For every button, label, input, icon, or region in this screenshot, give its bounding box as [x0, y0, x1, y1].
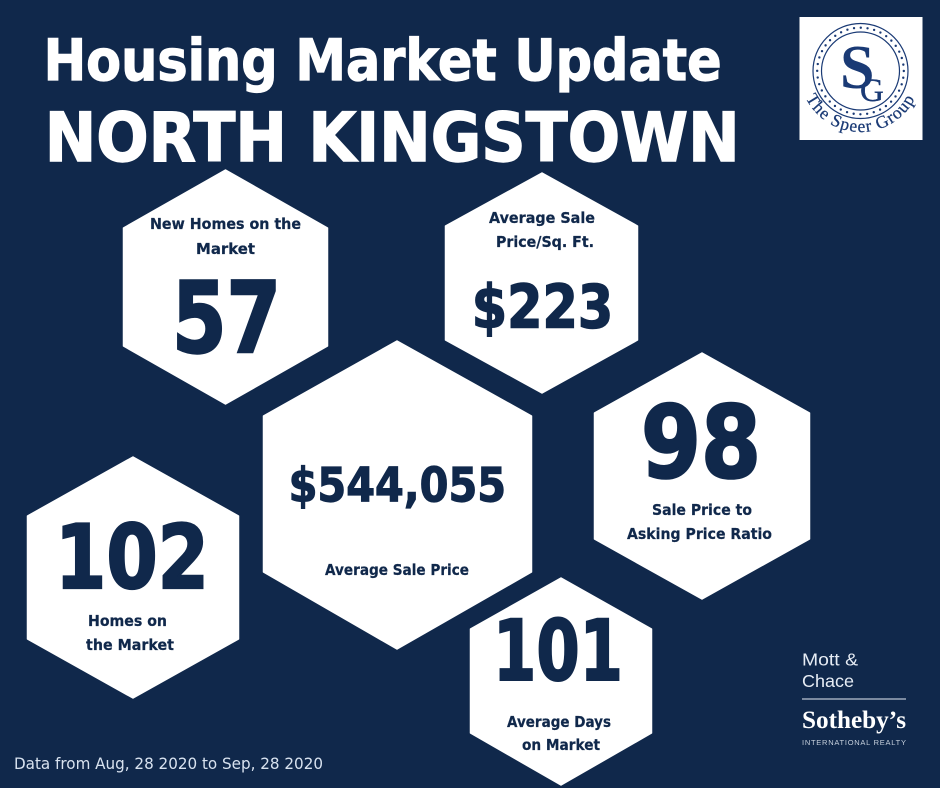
panel: average sale price per square foot: [446, 173, 638, 393]
title: [44, 28, 740, 178]
logo: The Speer Group: [800, 17, 922, 140]
value: 101: [493, 602, 623, 700]
value: $544,055: [289, 458, 506, 513]
value: 57: [172, 262, 281, 376]
label: Asking Price Ratio: [627, 525, 772, 543]
curved logo name: The Speer Group: [806, 92, 916, 134]
title line 1: Housing Market Update: [44, 28, 722, 94]
brand name: Chace: [802, 671, 854, 691]
panel: average days on market: [470, 578, 652, 785]
label: Average Days: [507, 713, 611, 731]
panel: average sale price: [264, 341, 532, 649]
Sotheby's wordmark: Sotheby’s: [802, 707, 906, 734]
logo background: [800, 17, 922, 140]
value: 98: [641, 384, 761, 501]
hexagon: [28, 457, 238, 698]
hexagon: [124, 170, 328, 404]
label: Market: [196, 240, 256, 258]
panel: new homes on the market: [124, 170, 328, 404]
hexagon: [446, 173, 638, 393]
panel: homes on the market: [28, 457, 238, 698]
brand name: Mott &: [802, 650, 858, 670]
value: 102: [55, 506, 209, 609]
hexagon: [264, 341, 532, 649]
label: New Homes on the: [150, 215, 301, 233]
label: Sale Price to: [652, 501, 752, 519]
monogram S: S: [840, 34, 874, 102]
label: Average Sale: [489, 209, 595, 227]
label: Price/Sq. Ft.: [496, 233, 594, 251]
label: Average Sale Price: [325, 561, 469, 579]
hexagon: [470, 578, 652, 785]
International Realty: INTERNATIONAL REALTY: [802, 738, 906, 747]
panel: sale price to asking price ratio: [594, 353, 810, 599]
label: on Market: [522, 736, 601, 754]
data source note: Data from Aug, 28 2020 to Sep, 28 2020: [14, 754, 323, 773]
value: $223: [472, 272, 613, 342]
hexagon: [594, 353, 810, 599]
label: the Market: [86, 636, 175, 654]
monogram G: G: [860, 73, 884, 109]
title line 2: NORTH KINGSTOWN: [45, 99, 740, 178]
logo: Mott & Chace Sotheby's International Realty: [802, 650, 906, 747]
label: Homes on: [88, 612, 167, 630]
logo rings: [813, 24, 908, 118]
